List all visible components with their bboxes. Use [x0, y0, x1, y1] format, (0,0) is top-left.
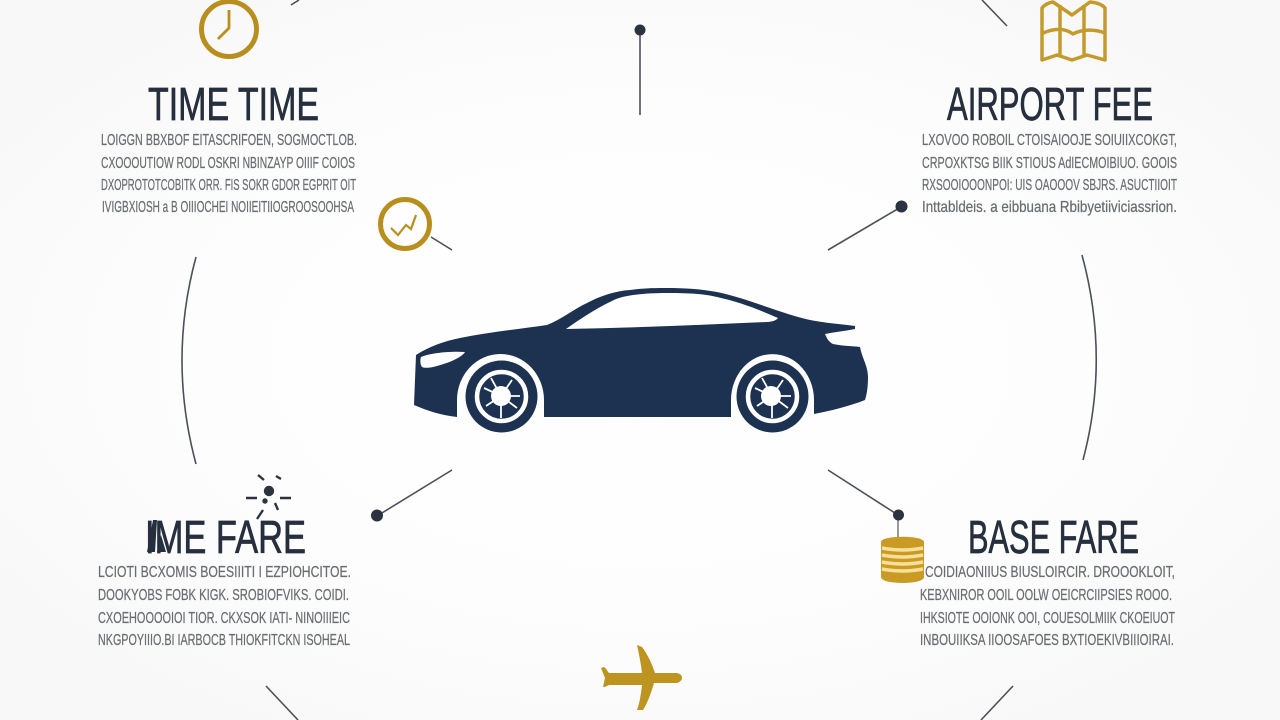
text block: time: LOIGGN BBXBOF EITASCRIFOEN, SOGMOCTLOB.	[101, 132, 357, 149]
heading: time: TIME TIME	[148, 78, 319, 130]
text block: time: IVIGBXIOSH a B OIIIOCHEI NOIIEITIIOGROOSOOHSA	[102, 199, 354, 216]
heading: airport fee: AIRPORT FEE	[947, 78, 1153, 130]
icon: broken splatter	[246, 475, 291, 519]
car window	[566, 293, 778, 329]
icon: magnifier check	[380, 200, 452, 250]
connector: airport fee	[828, 200, 908, 250]
connector: fare left	[371, 470, 452, 522]
connector: base fare	[828, 470, 904, 538]
panel: base fare	[881, 511, 1175, 649]
text block: time: DXOPROTOTCOBITK ORR. FIS SOKR GDOR EGPRIT OIT	[101, 177, 356, 194]
text block: airport fee: Inttabldeis. a eibbuana Rbibyetiiviciassrion.	[922, 199, 1177, 216]
icon: heading blot	[147, 520, 166, 552]
heading: fare left: IME FARE	[145, 511, 306, 563]
ring segments around the car	[182, 0, 1096, 720]
text block: time: CXOOOUTIOW RODL OSKRI NBINZAYP OIIIF COIOS	[101, 155, 355, 172]
text block: base fare: COIDIAONIIUS BIUSLOIRCIR. DROOOKLOIT,	[925, 564, 1175, 581]
icon: airplane	[601, 645, 682, 710]
panel: airport fee	[922, 2, 1177, 216]
front wheel	[466, 360, 538, 432]
text block: airport fee	[922, 132, 1177, 216]
icon: map	[1042, 2, 1105, 60]
text block: base fare	[920, 564, 1175, 649]
icon: coin stack	[881, 537, 924, 583]
panel: fare left	[98, 475, 351, 649]
panel: time	[101, 2, 357, 216]
text block: airport fee: LXOVOO ROBOIL CTOISAIOOJE SOIUIIXCOKGT,	[922, 132, 1177, 149]
text block: fare left	[98, 564, 351, 649]
text block: base fare: KEBXNIROR OOIL OOLW OEICRCIIPSIES ROOO.	[920, 587, 1172, 604]
car headlight	[420, 352, 465, 368]
text block: time	[101, 132, 357, 216]
text block: fare left: DOOKYOBS FOBK KIGK. SROBIOFVIKS. COIDI.	[98, 587, 349, 604]
text block: base fare: INBOUIIKSA IIOOSAFOES BXTIOEKIVBIIIOIRAI.	[920, 632, 1174, 649]
heading: base fare: BASE FARE	[968, 511, 1139, 563]
rear wheel	[736, 360, 808, 432]
text block: fare left: NKGPOYIIIO.BI IARBOCB THIOKFITCKN ISOHEAL	[98, 632, 350, 649]
icon: clock	[202, 2, 256, 56]
connector: top centre	[634, 24, 646, 115]
car illustration	[414, 288, 868, 432]
text block: fare left: LCIOTI BCXOMIS BOESIIITI I EZPIOHCITOE.	[98, 564, 351, 581]
text block: fare left: CXOEHOOOOIOI TIOR. CKXSOK IATI- NINOIIIEIC	[98, 610, 350, 627]
